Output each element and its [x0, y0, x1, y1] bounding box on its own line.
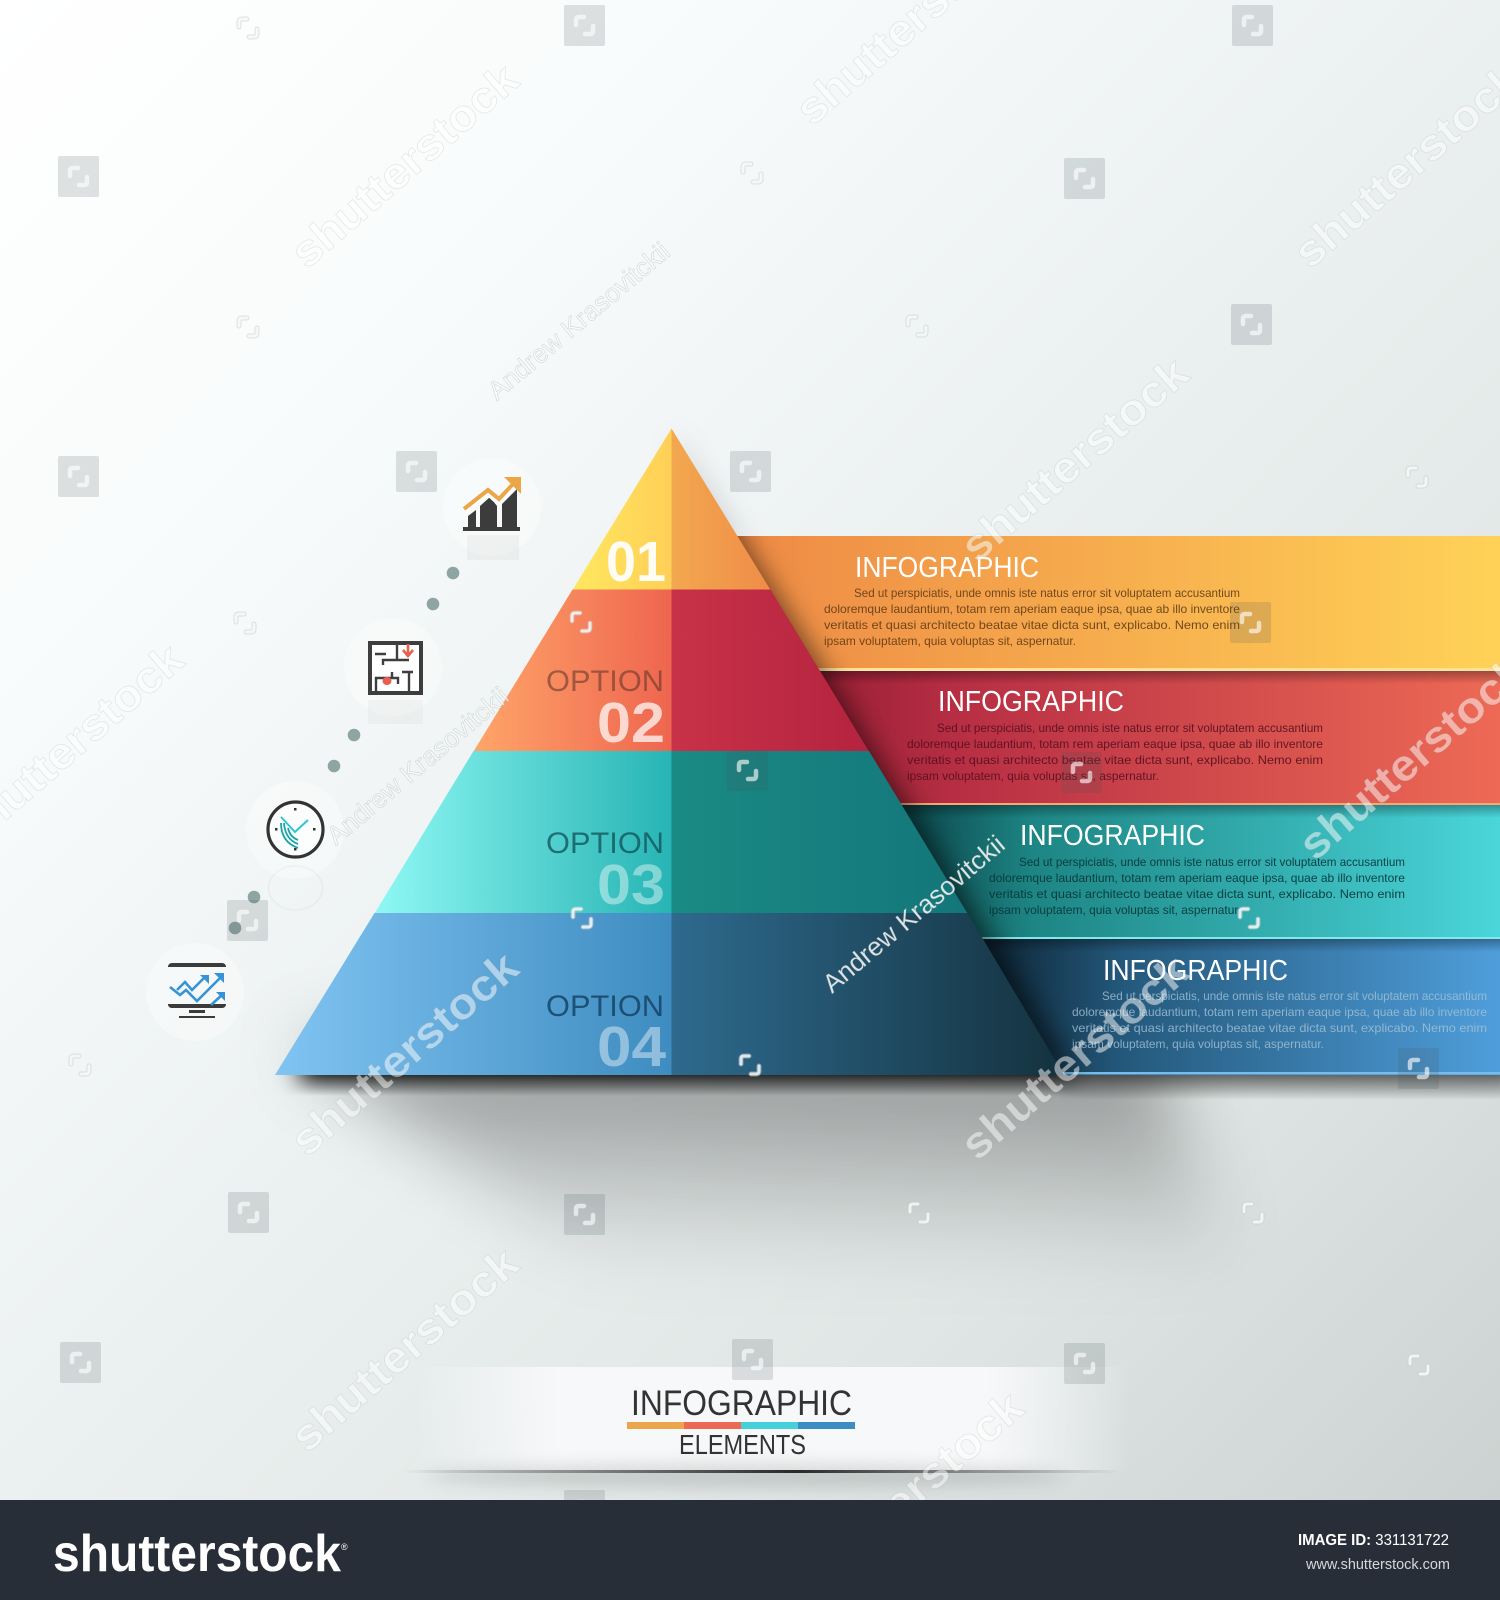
ribbon 2 red: [760, 671, 1500, 806]
ribbon 2 red: INFOGRAPHIC: [938, 686, 1124, 718]
ribbon 1 orange: Sed ut perspiciatis, unde omnis iste natus error sit voluptatem accusantium: [854, 586, 1240, 600]
ribbon 2 red: Sed ut perspiciatis, unde omnis iste natus error sit voluptatem accusantium: [937, 721, 1323, 735]
watermark text: shutterstock: [281, 942, 528, 1166]
footer bar: [0, 1500, 1500, 1600]
footer image id: IMAGE ID: 331131722: [1298, 1532, 1449, 1549]
soft shadow beside pyramid apex: [672, 428, 745, 545]
connector dots: [229, 567, 459, 934]
tier 2: [474, 590, 869, 755]
ribbon 4 blue: INFOGRAPHIC: [1103, 955, 1288, 987]
ribbon 4 blue: veritatis et quasi architecto beatae vitae dicta sunt, explicabo. Nemo enim: [1072, 1021, 1487, 1035]
panel: ribbons: [700, 536, 1500, 1075]
ribbon 4 blue: doloremque laudantium, totam rem aperiam eaque ipsa, quae ab illo inventore: [1072, 1005, 1487, 1019]
icon: monitor with arrows: [146, 943, 244, 1041]
ribbon 1 orange: INFOGRAPHIC: [855, 552, 1039, 584]
watermark author credit: Andrew Krasovitckii: [321, 681, 515, 851]
icon: bar chart with arrow: [443, 458, 541, 560]
watermark text: shutterstock: [951, 348, 1198, 572]
watermark author credit: Andrew Krasovitckii: [817, 829, 1011, 999]
icon: maze: [344, 618, 442, 724]
tier 2: OPTION: [546, 665, 664, 698]
tier 4: 04: [597, 1015, 666, 1079]
pyramid ground shadow: [290, 1040, 1500, 1280]
ribbon 3 teal: Sed ut perspiciatis, unde omnis iste natus error sit voluptatem accusantium: [1019, 855, 1405, 869]
panel: title banner: [400, 1367, 1130, 1488]
colour bar: [627, 1422, 855, 1429]
title: INFOGRAPHIC: INFOGRAPHIC: [631, 1384, 852, 1423]
tier 3: [374, 751, 968, 917]
footer logo: shutterstock: [53, 1525, 341, 1583]
tier 3: 03: [597, 853, 665, 917]
ribbon 1 orange: [700, 536, 1500, 670]
footer website: www.shutterstock.com: [1305, 1556, 1450, 1573]
ribbon 4 blue: Sed ut perspiciatis, unde omnis iste natus error sit voluptatem accusantium: [1102, 989, 1487, 1003]
icon: clock: [246, 781, 344, 910]
tier 3: OPTION: [546, 827, 664, 860]
ribbon 2 red: doloremque laudantium, totam rem aperiam eaque ipsa, quae ab illo inventore: [907, 737, 1323, 751]
footer registered mark: ®: [341, 1542, 348, 1552]
tier 4: OPTION: [546, 990, 664, 1023]
ribbon 1 orange: veritatis et quasi architecto beatae vitae dicta sunt, explicabo. Nemo enim: [824, 618, 1240, 632]
tier 4: [275, 913, 1064, 1079]
ribbon 1 orange: ipsam voluptatem, quia voluptas sit, aspernatur.: [824, 634, 1076, 648]
ribbon 3 teal: INFOGRAPHIC: [1020, 820, 1205, 852]
tier 1: 01: [606, 530, 666, 594]
ribbon 4 blue: [960, 939, 1500, 1075]
pyramid shadow cast on ribbons: [738, 536, 1087, 1075]
ribbon 4 blue: ipsam voluptatem, quia voluptas sit, aspernatur.: [1072, 1037, 1324, 1051]
ribbon 3 teal: veritatis et quasi architecto beatae vitae dicta sunt, explicabo. Nemo enim: [989, 887, 1405, 901]
ribbon 3 teal: ipsam voluptatem, quia voluptas sit, aspernatur.: [989, 903, 1241, 917]
tier 1: [572, 428, 770, 594]
watermark text: shutterstock: [786, 1382, 1033, 1600]
watermark text: shutterstock: [951, 946, 1198, 1170]
subtitle: ELEMENTS: ELEMENTS: [679, 1429, 806, 1460]
watermark text: shutterstock: [281, 1238, 528, 1462]
tier 2: 02: [597, 691, 665, 755]
ribbon 3 teal: doloremque laudantium, totam rem aperiam eaque ipsa, quae ab illo inventore: [989, 871, 1405, 885]
ribbon 2 red: ipsam voluptatem, quia voluptas sit, aspernatur.: [907, 769, 1159, 783]
watermark author credit: [321, 236, 1011, 999]
panel: pyramid: [275, 428, 1064, 1079]
watermark text: shutterstock: [281, 54, 528, 278]
watermark author credit: Andrew Krasovitckii: [482, 236, 676, 406]
ribbon 3 teal: [860, 805, 1500, 940]
ribbon 1 orange: doloremque laudantium, totam rem aperiam eaque ipsa, quae ab illo inventore: [824, 602, 1240, 616]
ribbon 2 red: veritatis et quasi architecto beatae vitae dicta sunt, explicabo. Nemo enim: [907, 753, 1323, 767]
